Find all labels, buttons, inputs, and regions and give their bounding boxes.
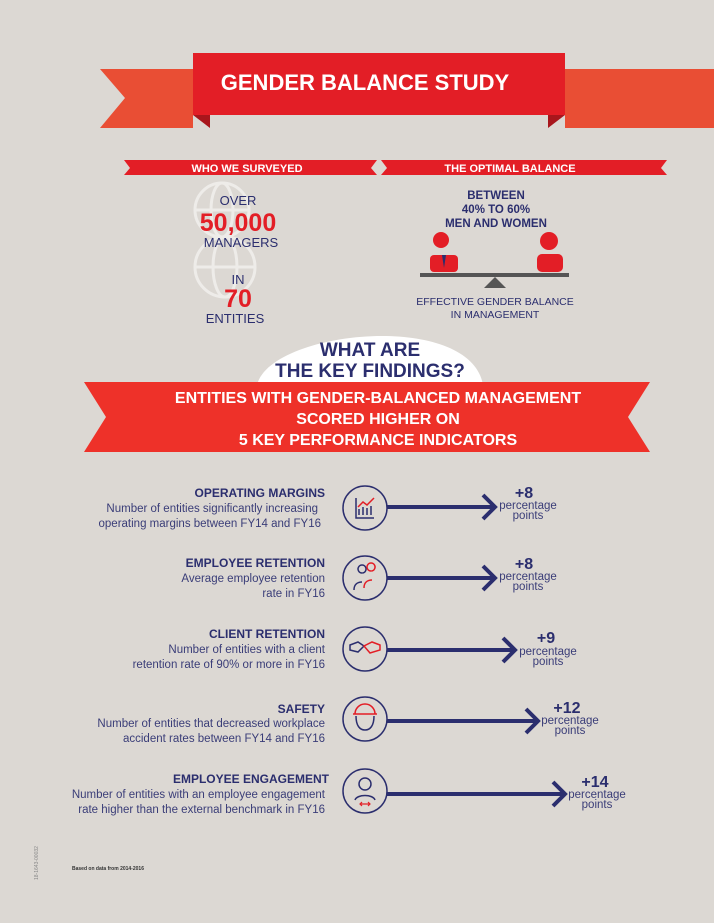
banner: key findings — [84, 382, 650, 452]
row: employee retention — [181, 556, 557, 600]
row: employee retention: EMPLOYEE RETENTION — [186, 556, 325, 570]
title banner — [100, 53, 714, 128]
row: safety: +12 — [553, 700, 581, 717]
row: client retention: retention rate of 90% or more in FY16 — [133, 659, 325, 671]
optimal balance text: 40% TO 60% — [462, 204, 530, 216]
row: operating margins: operating margins between FY14 and FY16 — [99, 518, 321, 530]
ribbon: optimal balance: THE OPTIMAL BALANCE — [444, 163, 576, 175]
row: operating margins: Number of entities significantly increasing — [106, 503, 318, 515]
optimal balance text: MEN AND WOMEN — [445, 218, 547, 230]
row: safety: points — [555, 725, 586, 737]
title banner: GENDER BALANCE STUDY — [221, 70, 510, 95]
row: operating margins: percentage — [499, 500, 557, 512]
stats: surveyed: OVER — [220, 193, 256, 208]
dome heading: WHAT ARE — [320, 340, 420, 361]
ribbon: who we surveyed: WHO WE SURVEYED — [191, 163, 303, 175]
row: safety: accident rates between FY14 and FY16 — [123, 733, 325, 745]
stats: surveyed: ENTITIES — [206, 311, 265, 326]
row: safety: SAFETY — [278, 702, 325, 716]
row: employee engagement: rate higher than the external benchmark in FY16 — [78, 804, 325, 816]
banner: key findings: ENTITIES WITH GENDER-BALANCED MANAGEMENT — [175, 390, 581, 407]
caption: effective balance: EFFECTIVE GENDER BALANCE — [416, 296, 574, 308]
row: safety — [97, 697, 599, 745]
stats: surveyed: 70 — [224, 285, 252, 313]
stats: surveyed: 50,000 — [200, 209, 276, 237]
footnote: Based on data from 2014-2016 — [72, 866, 144, 872]
row: employee retention: percentage — [499, 571, 557, 583]
caption: effective balance — [416, 296, 574, 321]
row: employee engagement: +14 — [581, 774, 609, 791]
ribbon: who we surveyed — [124, 160, 377, 175]
row: operating margins: OPERATING MARGINS — [195, 486, 325, 500]
row: client retention: Number of entities with a client — [168, 644, 326, 656]
stats: surveyed: MANAGERS — [204, 235, 279, 250]
banner: key findings: SCORED HIGHER ON — [296, 411, 460, 428]
row: client retention: CLIENT RETENTION — [209, 627, 325, 641]
icon: seesaw with man and woman — [420, 232, 569, 288]
stats: surveyed: IN — [232, 272, 244, 287]
dome heading — [257, 336, 483, 385]
optimal balance text: BETWEEN — [467, 190, 525, 202]
row: employee engagement: points — [582, 799, 613, 811]
ribbon: optimal balance — [381, 160, 667, 175]
row: employee retention: rate in FY16 — [262, 588, 325, 600]
row: safety: Number of entities that decreased workplace — [97, 718, 325, 730]
banner: key findings: 5 KEY PERFORMANCE INDICATORS — [239, 432, 517, 449]
row: employee engagement: percentage — [568, 789, 626, 801]
row: operating margins: points — [513, 510, 544, 522]
row: employee retention: Average employee retention — [181, 573, 325, 585]
row: employee engagement — [72, 769, 626, 816]
side code: 18-1643-00032 — [34, 846, 40, 880]
row: operating margins: +8 — [515, 485, 533, 502]
row: client retention: +9 — [537, 630, 555, 647]
row: safety: percentage — [541, 715, 599, 727]
row: client retention: percentage — [519, 646, 577, 658]
dome heading: THE KEY FINDINGS? — [275, 361, 465, 382]
row: client retention: points — [533, 656, 564, 668]
row: operating margins — [99, 485, 557, 530]
row: employee engagement: EMPLOYEE ENGAGEMENT — [173, 772, 330, 786]
optimal balance text — [445, 190, 547, 230]
row: employee retention: +8 — [515, 556, 533, 573]
row: employee engagement: Number of entities with an employee engagement — [72, 789, 326, 801]
row: client retention — [133, 627, 577, 671]
icon: globes — [195, 183, 255, 297]
caption: effective balance: IN MANAGEMENT — [451, 309, 540, 321]
stats: surveyed — [200, 193, 279, 326]
row: employee retention: points — [513, 581, 544, 593]
